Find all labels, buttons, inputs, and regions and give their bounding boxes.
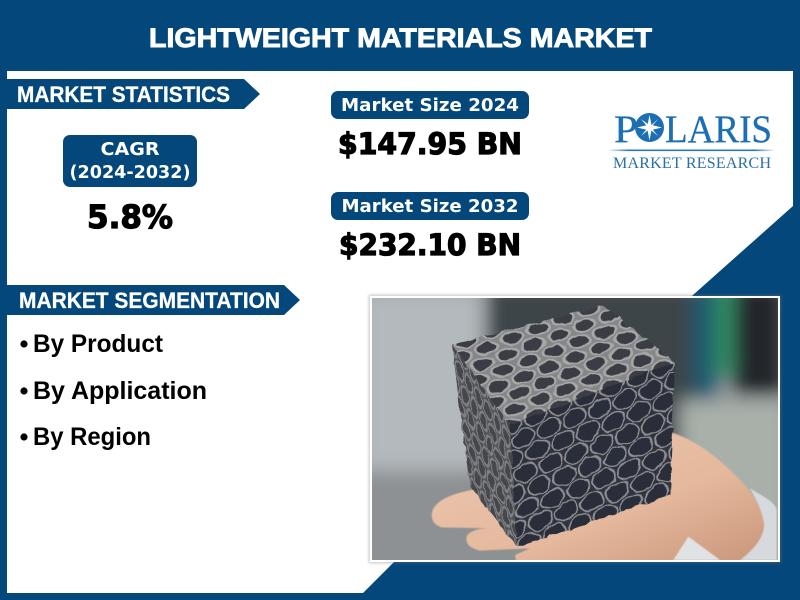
lattice cube bbox=[452, 305, 675, 547]
item: by product: By Product bbox=[33, 330, 164, 358]
label pill 2032: Market Size 2032 bbox=[342, 197, 518, 217]
logo: Polaris Market Research: LARIS bbox=[665, 108, 772, 151]
cube: top face bbox=[452, 305, 675, 425]
CAGR value: 5.8% bbox=[87, 198, 173, 236]
logo: Polaris Market Research bbox=[608, 108, 775, 172]
item: by application: By Application bbox=[33, 377, 207, 405]
stat: market size 2032 bbox=[331, 192, 529, 262]
item: by region: By Region bbox=[33, 423, 151, 451]
segmentation list bbox=[20, 330, 207, 451]
title: LIGHTWEIGHT MATERIALS MARKET bbox=[149, 23, 653, 53]
photo: lattice cube on a hand bbox=[360, 285, 790, 570]
label pill 2024 bbox=[331, 91, 529, 119]
stat: CAGR bbox=[63, 135, 197, 236]
stat: market size 2024 bbox=[331, 91, 529, 161]
CAGR label pill bbox=[63, 135, 197, 187]
value 2024: $147.95 BN bbox=[338, 127, 522, 161]
label pill 2024: Market Size 2024 bbox=[341, 96, 519, 116]
banner: market statistics: MARKET STATISTICS bbox=[17, 82, 230, 107]
logo: Polaris Market Research: P bbox=[614, 108, 638, 151]
logo: Polaris Market Research: MARKET RESEARCH bbox=[613, 155, 771, 172]
value 2032: $232.10 BN bbox=[339, 228, 521, 262]
CAGR label pill: CAGR bbox=[100, 140, 160, 160]
cube: front face bbox=[510, 362, 675, 547]
banner: market segmentation: MARKET SEGMENTATION bbox=[19, 288, 280, 313]
icon: star in circle bbox=[635, 113, 664, 142]
cube: left face bbox=[452, 345, 517, 547]
CAGR label pill: (2024-2032) bbox=[70, 163, 190, 183]
hand bbox=[432, 432, 777, 563]
label pill 2032 bbox=[331, 192, 529, 220]
